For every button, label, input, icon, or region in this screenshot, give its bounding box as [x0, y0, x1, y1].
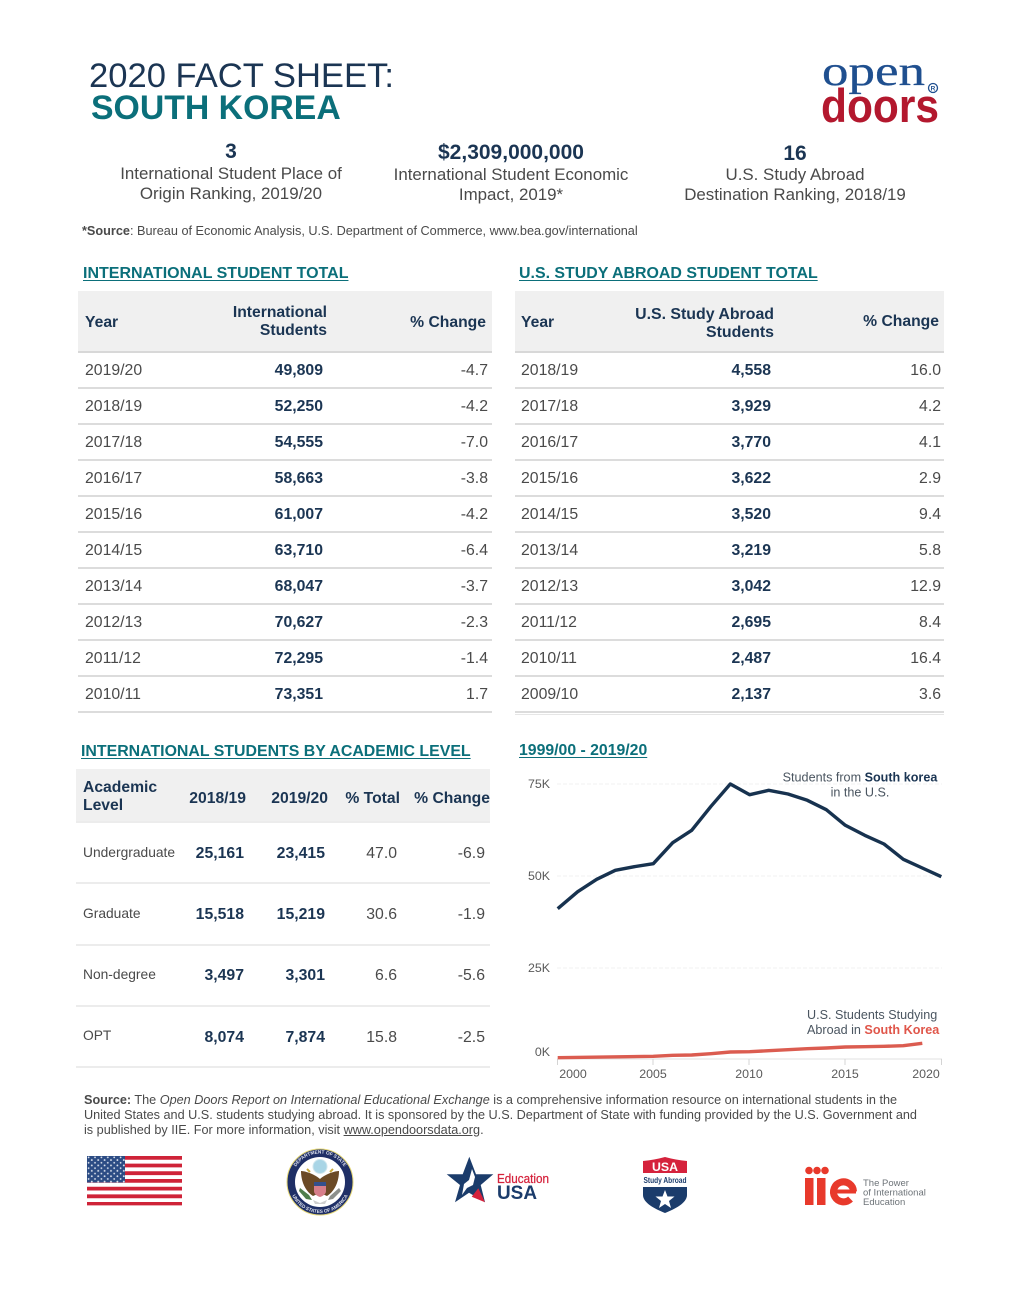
title: SOUTH KOREA	[91, 89, 341, 127]
stat: study abroad ranking: Destination Ranking, 2018/19	[684, 185, 906, 204]
table: international student total: 2017/18	[85, 434, 142, 451]
table: U.S. study abroad student total: Year	[521, 314, 554, 331]
y axis labels: 0K	[535, 1045, 551, 1059]
logo: IIE	[805, 1166, 926, 1208]
table: international student total: 54,555	[275, 434, 323, 451]
table: international student total: 68,047	[275, 578, 323, 595]
x axis labels	[559, 1067, 940, 1081]
table: students by academic level: -6.9	[458, 845, 485, 862]
table: U.S. study abroad student total	[515, 291, 944, 713]
x axis labels: 2000	[559, 1067, 587, 1081]
table: international student total: 2013/14	[85, 578, 142, 595]
logo: IIE: of International	[863, 1188, 926, 1198]
table: U.S. study abroad student total: Students	[706, 324, 774, 341]
logo: EducationUSA: Education	[497, 1172, 549, 1186]
table: international student total: 72,295	[275, 650, 323, 666]
table: students by academic level: 25,161	[196, 845, 244, 862]
table: U.S. study abroad student total: 2015/16	[521, 470, 578, 487]
source paragraph: United States and U.S. students studying abroad. It is sponsored by the U.S. Department of State with funding provided by the U.S. Government and	[84, 1108, 917, 1122]
x axis labels: 2010	[735, 1067, 763, 1081]
table: U.S. study abroad student total: 2013/14	[521, 542, 578, 559]
table: U.S. study abroad student total: 2,487	[731, 650, 771, 666]
table: international student total: 63,710	[275, 542, 323, 559]
table: international student total: Students	[260, 322, 327, 338]
logo: IIE: Education	[863, 1197, 905, 1208]
table: international student total: 2018/19	[85, 398, 142, 415]
table: U.S. study abroad student total: 16.0	[910, 362, 941, 379]
table: students by academic level: % Change	[414, 790, 490, 807]
source paragraph	[84, 1092, 917, 1136]
table: students by academic level: 15.8	[366, 1029, 397, 1046]
table: international student total: 2016/17	[85, 470, 142, 487]
icon: Department of State seal	[286, 1148, 354, 1216]
table: students by academic level: Graduate	[83, 906, 141, 921]
logo: EducationUSA: USA	[497, 1182, 537, 1204]
line: students from South Korea in the U.S.	[558, 784, 941, 909]
table: U.S. study abroad student total: 3,770	[731, 434, 771, 451]
table: U.S. study abroad student total: 4.2	[919, 398, 941, 415]
logo: Open Doors	[821, 52, 939, 130]
table: international student total: -4.2	[461, 506, 488, 523]
table: international student total: 70,627	[275, 614, 323, 630]
table: international student total: -1.4	[461, 650, 488, 666]
title	[89, 57, 394, 127]
table: international student total: -7.0	[461, 434, 488, 451]
table: U.S. study abroad student total: 3.6	[919, 686, 941, 702]
table: students by academic level: Non-degree	[83, 967, 156, 982]
stat: study abroad ranking	[684, 142, 906, 204]
annotation: U.S. students abroad: U.S. Students Studying	[807, 1008, 937, 1022]
table: international student total: -3.8	[461, 470, 488, 487]
table: U.S. study abroad student total: 2,695	[731, 614, 771, 630]
table: international student total: 2014/15	[85, 542, 142, 559]
source paragraph: is published by IIE. For more information, visit www.opendoorsdata.org.	[84, 1122, 484, 1136]
y axis labels: 25K	[528, 961, 551, 975]
line chart: students 1999/00 - 2019/20	[528, 770, 942, 1081]
table: international student total	[78, 291, 492, 713]
table: students by academic level: OPT	[83, 1028, 111, 1043]
stat: study abroad ranking: 16	[783, 142, 807, 165]
table: U.S. study abroad student total: U.S. Study Abroad	[635, 306, 774, 323]
y axis labels: 75K	[528, 777, 551, 791]
table: students by academic level: 7,874	[285, 1029, 325, 1046]
y axis labels: 50K	[528, 869, 551, 883]
table: U.S. study abroad student total: 4,558	[731, 362, 771, 379]
table: international student total: 2010/11	[85, 686, 141, 702]
table: students by academic level: 15,219	[277, 906, 325, 923]
x axis labels: 2005	[639, 1067, 667, 1081]
y axis labels	[528, 777, 551, 1059]
heading: line chart period: 1999/00 - 2019/20	[519, 742, 647, 759]
table: students by academic level: 8,074	[204, 1029, 244, 1046]
table: U.S. study abroad student total: 16.4	[910, 650, 941, 666]
table: students by academic level: Academic	[83, 779, 157, 796]
table: international student total: 73,351	[275, 686, 323, 702]
table: international student total: Year	[85, 314, 118, 331]
icon: U.S. flag	[87, 1156, 182, 1206]
table: U.S. study abroad student total: 3,219	[731, 542, 771, 559]
table: students by academic level: Undergraduate	[83, 845, 175, 860]
stat: place of origin ranking: International Student Place of	[120, 164, 342, 183]
table: international student total: 52,250	[275, 398, 323, 415]
table: students by academic level: Level	[83, 797, 123, 814]
x axis labels: 2020	[912, 1067, 940, 1081]
logo: Open Doors: R	[931, 86, 936, 92]
table: international student total: 49,809	[275, 362, 323, 379]
table: international student total: International	[233, 304, 327, 320]
x axis labels: 2015	[831, 1067, 859, 1081]
table: U.S. study abroad student total: 8.4	[919, 614, 941, 630]
table: students by academic level: 2018/19	[189, 790, 246, 807]
table: students by academic level: -2.5	[458, 1029, 485, 1046]
stat: study abroad ranking: U.S. Study Abroad	[726, 165, 864, 184]
source footnote: *Source: Bureau of Economic Analysis, U.S. Department of Commerce, www.bea.gov/international	[82, 224, 638, 238]
table: students by academic level: 6.6	[375, 967, 397, 984]
icon: Department of State seal: UNITED STATES OF AMERICA	[292, 1194, 348, 1213]
stat: place of origin ranking: 3	[225, 140, 237, 163]
source paragraph: Source: The Open Doors Report on International Educational Exchange is a comprehensive information resource on international students in the	[84, 1092, 897, 1106]
table: international student total: -4.7	[461, 362, 488, 379]
table: students by academic level: 3,301	[285, 967, 325, 984]
table: students by academic level: 3,497	[204, 967, 244, 984]
table: students by academic level: 30.6	[366, 906, 397, 923]
icon: Department of State seal: DEPARTMENT OF STATE	[293, 1150, 347, 1167]
table: international student total: 2019/20	[85, 362, 142, 379]
table: students by academic level: -5.6	[458, 967, 485, 984]
table: U.S. study abroad student total: 2011/12	[521, 614, 577, 630]
logo: USA Study Abroad shield: USA	[652, 1160, 678, 1174]
heading: international student total: INTERNATIONAL STUDENT TOTAL	[83, 265, 348, 282]
table: U.S. study abroad student total: 2,137	[731, 686, 771, 702]
table: students by academic level: 23,415	[277, 845, 325, 862]
table: U.S. study abroad student total: 3,520	[731, 506, 771, 523]
annotation: students from South Korea: in the U.S.	[831, 786, 889, 800]
table: U.S. study abroad student total: 5.8	[919, 542, 941, 559]
heading: students by academic level: INTERNATIONAL STUDENTS BY ACADEMIC LEVEL	[81, 743, 471, 760]
table: international student total: 2015/16	[85, 506, 142, 523]
stat: economic impact: International Student Economic	[394, 165, 628, 184]
table: U.S. study abroad student total: 4.1	[919, 434, 941, 451]
table: students by academic level: 15,518	[196, 906, 244, 923]
table: international student total: 2012/13	[85, 614, 142, 630]
table: students by academic level: 2019/20	[271, 790, 328, 807]
logo: USA Study Abroad shield	[643, 1157, 687, 1213]
table: U.S. study abroad student total: 2010/11	[521, 650, 577, 666]
table: international student total: -6.4	[461, 542, 488, 559]
table: international student total: 2011/12	[85, 650, 141, 666]
annotation: U.S. students abroad: Abroad in South Korea	[807, 1023, 939, 1037]
table: international student total: -4.2	[461, 398, 488, 415]
table: U.S. study abroad student total: 3,929	[731, 398, 771, 415]
table: international student total: -3.7	[461, 578, 488, 595]
table: U.S. study abroad student total: 2018/19	[521, 362, 578, 379]
table: international student total: -2.3	[461, 614, 488, 630]
table: international student total: 58,663	[275, 470, 323, 487]
table: students by academic level: -1.9	[458, 906, 485, 923]
stat: economic impact	[394, 141, 628, 204]
stat: economic impact: Impact, 2019*	[459, 185, 563, 204]
table: students by academic level	[76, 769, 490, 1068]
table: international student total: 1.7	[466, 686, 488, 702]
table: U.S. study abroad student total: 3,042	[731, 578, 771, 594]
table: international student total: 61,007	[275, 506, 323, 523]
logo: EducationUSA	[446, 1156, 549, 1204]
table: U.S. study abroad student total: 9.4	[919, 506, 941, 523]
heading: U.S. study abroad student total: U.S. STUDY ABROAD STUDENT TOTAL	[519, 265, 818, 282]
table: students by academic level: 47.0	[366, 845, 397, 862]
table: U.S. study abroad student total: 2016/17	[521, 434, 578, 451]
table: U.S. study abroad student total: 2017/18	[521, 398, 578, 415]
stat: economic impact: $2,309,000,000	[438, 141, 584, 164]
logo: IIE: The Power	[863, 1178, 909, 1189]
table: U.S. study abroad student total: 2012/13	[521, 578, 578, 594]
table: students by academic level: % Total	[345, 790, 400, 807]
title: 2020 FACT SHEET:	[89, 57, 394, 95]
table: international student total: % Change	[410, 314, 486, 331]
table: U.S. study abroad student total: % Change	[863, 313, 939, 330]
stat: place of origin ranking: Origin Ranking, 2019/20	[140, 184, 322, 203]
stat: place of origin ranking	[120, 140, 342, 203]
table: U.S. study abroad student total: 2.9	[919, 470, 941, 487]
table: U.S. study abroad student total: 2014/15	[521, 506, 578, 523]
table: U.S. study abroad student total: 3,622	[731, 470, 771, 487]
table: U.S. study abroad student total: 12.9	[910, 578, 941, 594]
table: U.S. study abroad student total: 2009/10	[521, 686, 578, 702]
line: U.S. students studying abroad in South Korea	[558, 1043, 922, 1058]
annotation: students from South Korea: Students from South korea	[783, 770, 937, 784]
